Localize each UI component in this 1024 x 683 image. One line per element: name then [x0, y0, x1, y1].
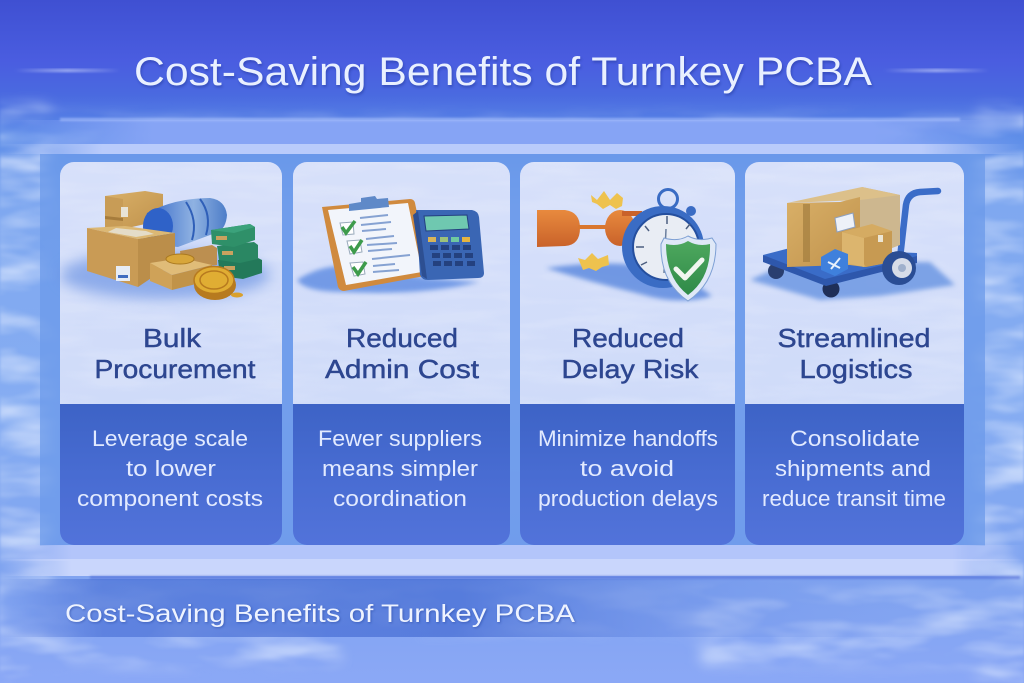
panel: reduced delay risk: [520, 162, 735, 545]
description: shipments and: [775, 456, 931, 481]
lower band: [0, 545, 1024, 576]
heading: Streamlined: [778, 323, 930, 353]
description: coordination: [333, 486, 467, 511]
card texture: [293, 162, 510, 404]
description: means simpler: [322, 456, 478, 481]
description: Consolidate: [790, 426, 920, 451]
description: production delays: [538, 486, 718, 511]
card bottom: [60, 404, 282, 545]
description: [77, 426, 263, 511]
description: to lower: [126, 456, 216, 481]
icon: clipboard and calculator: [297, 196, 484, 293]
drum: [143, 198, 227, 247]
heading: Logistics: [800, 354, 912, 384]
description: [318, 426, 482, 511]
heading: Reduced: [572, 323, 684, 353]
inner panel: [40, 154, 985, 546]
heading: Procurement: [94, 354, 256, 384]
heading: [562, 323, 700, 384]
description: [538, 426, 718, 511]
green crates: [218, 257, 262, 279]
panel: reduced admin cost: [293, 162, 510, 545]
title with side rules: [15, 50, 989, 96]
panel: streamlined logistics: [745, 162, 964, 545]
panel: bulk procurement: [60, 162, 282, 545]
heading: Reduced: [346, 323, 458, 353]
card texture: [520, 162, 735, 404]
footer title: Cost-Saving Benefits of Turnkey PCBA: [66, 601, 576, 629]
description: component costs: [77, 486, 263, 511]
footer strip: [0, 576, 1024, 637]
card top: [293, 162, 510, 404]
description: Minimize handoffs: [538, 426, 718, 451]
card top: [520, 162, 735, 404]
description: Fewer suppliers: [318, 426, 482, 451]
coin: [194, 270, 236, 300]
footer strip: Cost-Saving Benefits of Turnkey PCBA: [65, 600, 575, 628]
title with side rules: Cost-Saving Benefits of Turnkey PCBA: [135, 52, 873, 96]
heading: Delay Risk: [562, 354, 700, 384]
card bottom: [293, 404, 510, 545]
icon: cart with parcels: [750, 187, 955, 300]
description: reduce transit time: [762, 486, 946, 511]
card texture: [60, 162, 282, 404]
description: Leverage scale: [92, 426, 248, 451]
heading: [325, 323, 480, 384]
card bottom: [520, 404, 735, 545]
heading: Admin Cost: [325, 354, 480, 384]
card bottom: [745, 404, 964, 545]
icon: stopwatch and shield: [537, 190, 716, 301]
title with side rules: Cost-Saving Benefits of Turnkey PCBA: [134, 50, 872, 94]
upper band: [0, 118, 1024, 154]
heading: [778, 323, 930, 384]
card top: [745, 162, 964, 404]
description: [762, 426, 946, 511]
heading: [94, 323, 256, 384]
heading: Bulk: [143, 323, 202, 353]
card texture: [745, 162, 964, 404]
description: to avoid: [580, 456, 674, 481]
icon: boxes, drum and coins: [60, 191, 270, 300]
card top: [60, 162, 282, 404]
